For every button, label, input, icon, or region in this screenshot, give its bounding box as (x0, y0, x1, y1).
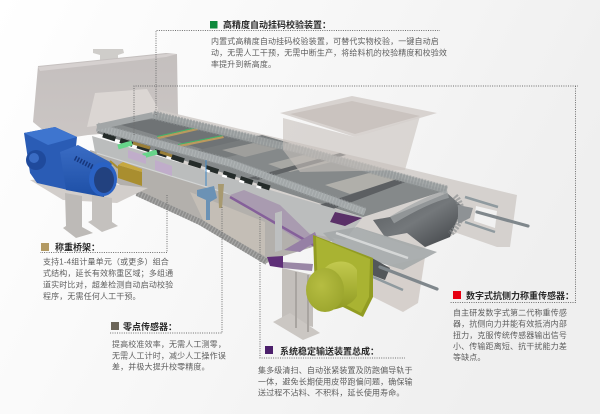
heading: 高精度自动挂码校验装置： (223, 19, 331, 30)
belt surface (97, 115, 447, 217)
machine illustration: belt weigh feeder (24, 49, 528, 340)
panel: conveying assembly (258, 346, 415, 398)
description: 一体，避免长期使用皮带跑偏问题，确保输 (258, 376, 413, 386)
description: 式结构，延长有效称重区域；多组通 (43, 268, 173, 278)
description: 动，无需人工干预，无需中断生产，将给料机的校验精度和校验效 (211, 48, 447, 58)
olive gear motor (306, 235, 373, 317)
description: 提高校准效率，无需人工测零， (112, 339, 226, 349)
leader lines (40, 30, 578, 358)
description: 送过程不沾料、不积料，延长使用寿命。 (258, 388, 405, 398)
heading: 称重桥架： (55, 242, 100, 252)
blue drive motor (24, 127, 117, 197)
load cell box (110, 161, 142, 186)
description: 等缺点。 (453, 352, 486, 362)
description: 无需人工计时，减少人工操作误 (112, 350, 226, 360)
weighing rollers (103, 135, 270, 188)
description: 器，抗侧向力并能有效抵消内部 (453, 318, 567, 328)
tension rods (458, 197, 528, 232)
description: 支持1-4组计量单元（或更多）组合 (43, 256, 169, 266)
icon: tan square (41, 243, 49, 251)
rod window (474, 206, 497, 228)
front guard plate (323, 227, 437, 312)
description: 差，并极大提升校零精度。 (112, 362, 210, 372)
heading: 数字式抗侧力称重传感器： (466, 290, 574, 301)
description: 自主研发数字式第二代称重传感 (453, 308, 567, 318)
front side body (90, 150, 335, 263)
heading: 系统稳定输送装置总成： (280, 346, 379, 356)
description: 率提升到新高度。 (211, 59, 276, 69)
description: 小、传输距离短、抗干扰能力差 (453, 341, 567, 351)
panel: zero sensor (111, 321, 228, 372)
icon: grey square (111, 322, 119, 330)
icon: green square (210, 21, 218, 28)
left inlet hood (33, 49, 178, 140)
description: 集多级清扫、自动张紧装置及防跑偏导轨于 (258, 365, 413, 375)
purple support frames (128, 150, 362, 271)
panel: digital load cell (453, 290, 574, 362)
icon: red square (453, 291, 461, 299)
right support leg (273, 268, 320, 340)
heading: 零点传感器： (123, 321, 177, 332)
tail drum (373, 193, 463, 247)
left supports (30, 178, 148, 238)
panel: auto calibration device (210, 19, 449, 69)
side post (275, 211, 282, 252)
front screw rods (372, 258, 437, 290)
area under belt (92, 136, 363, 240)
description: 程序，无需任何人工干预。 (43, 291, 141, 301)
description: 扭力，克服传统传感器输出信号 (453, 330, 567, 340)
icon: purple square (265, 346, 273, 354)
description: 道实时比对，超差检测自动启动校验 (43, 280, 173, 290)
description: 内置式高精度自动挂码校验装置，可替代实物校验，一键自动启 (211, 36, 439, 46)
back side frame (160, 110, 517, 250)
belt side chains (97, 115, 447, 212)
blue sensor bracket (197, 160, 224, 220)
panel: weighing bridge (41, 242, 176, 301)
right feed hopper (280, 96, 437, 172)
